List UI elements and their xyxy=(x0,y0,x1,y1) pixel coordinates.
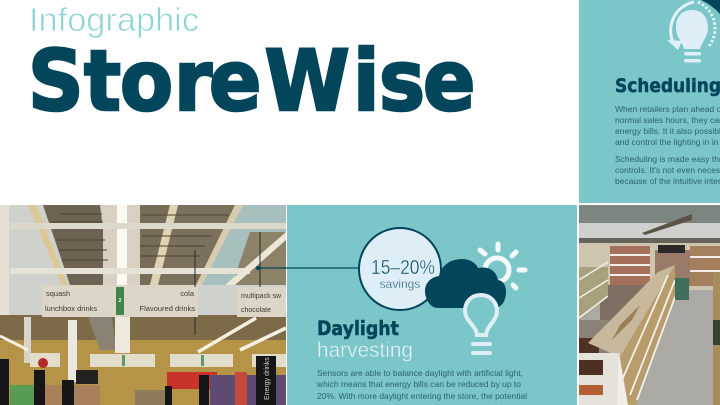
subheading: harvesting: harvesting xyxy=(317,339,413,362)
aisle sign: squash and cola: lunchbox drinks xyxy=(45,304,97,313)
photo: supermarket ceiling with aisle signs xyxy=(0,205,286,405)
icon: sun xyxy=(480,244,525,288)
aisle sign: multipack and chocolate: chocolate xyxy=(241,307,271,314)
text block: scheduling body: energy bills. It it also possibl xyxy=(615,126,720,136)
text block: daylight body xyxy=(316,368,527,401)
text block: daylight body: which means that energy bills can be reduced by up to xyxy=(316,379,521,389)
icon: light bulb xyxy=(465,295,497,355)
lower ceiling xyxy=(0,315,286,341)
text block: scheduling body: because of the intuitive inter xyxy=(615,176,720,186)
aisle sign: squash and cola: Flavoured drinks xyxy=(140,304,195,313)
callout: savings: savings xyxy=(380,277,420,291)
icon: cloud xyxy=(425,259,506,308)
text block: scheduling body: and control the lighting in in xyxy=(615,137,719,147)
text block: scheduling body xyxy=(615,104,720,186)
aisle sign: squash and cola: cola xyxy=(180,289,195,298)
aisle sign: squash and cola: squash xyxy=(46,289,70,298)
text block: daylight body: 20%. With more daylight entering the store, the potential xyxy=(317,391,527,401)
callout: savings xyxy=(359,228,441,310)
panel: daylight harvesting xyxy=(256,205,577,405)
text block: scheduling body: When retailers plan ahead o xyxy=(615,104,720,114)
callout: savings: 15–20% xyxy=(371,257,435,279)
panel: scheduling xyxy=(579,0,720,203)
title: StoreWise: StoreWise xyxy=(28,33,475,131)
icon: scheduling bulb xyxy=(667,0,720,62)
heading: Daylight: Daylight xyxy=(317,317,399,340)
label: Infographic: Infographic xyxy=(29,1,199,38)
connector line xyxy=(256,266,360,270)
text block: daylight body: Sensors are able to balance daylight with artificial light, xyxy=(317,368,523,378)
text block: scheduling body: Scheduling is made easy thr xyxy=(615,154,720,164)
aisle sign: squash and cola: 2 xyxy=(119,298,122,304)
photo: store aisles xyxy=(579,205,720,405)
aisle sign: multipack and chocolate: multipack sw xyxy=(241,293,282,300)
photo: supermarket ceiling with aisle signs: Energy drinks xyxy=(264,357,271,400)
aisle sign: multipack and chocolate xyxy=(237,287,286,317)
aisle sign: squash and cola xyxy=(42,285,198,317)
